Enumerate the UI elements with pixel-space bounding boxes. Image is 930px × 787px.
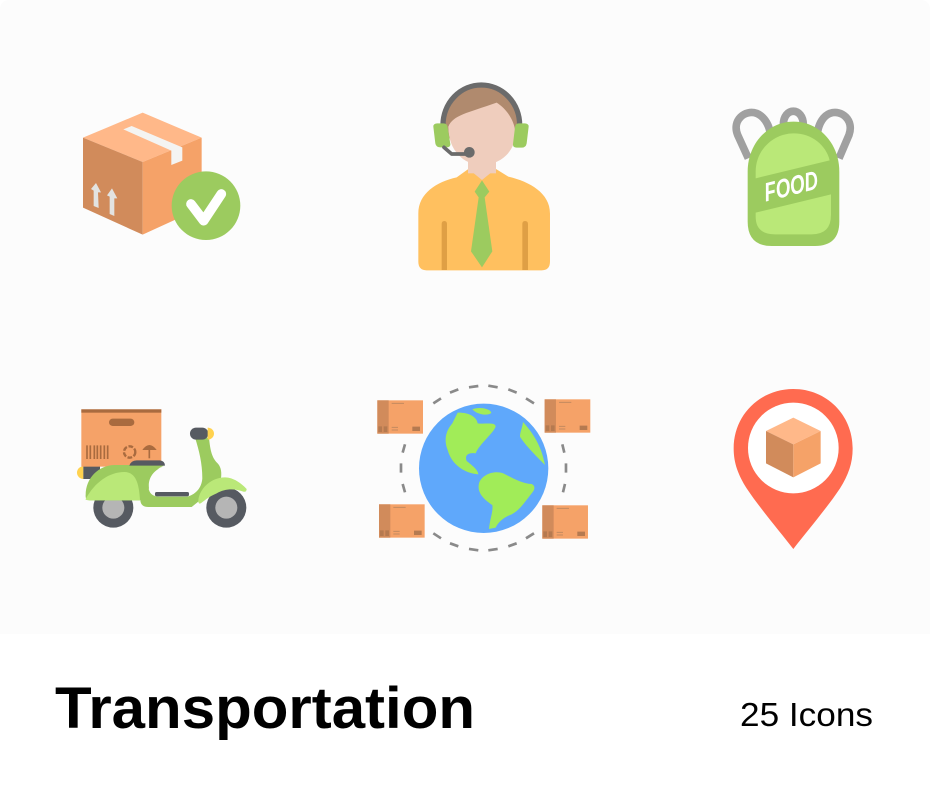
icon: global shipping globe	[377, 386, 590, 550]
icon: support agent with headset	[418, 85, 550, 270]
text: icon count: 25 Icons	[740, 696, 873, 733]
dashed orbit	[401, 386, 566, 550]
icon: parcel with check mark	[83, 113, 240, 240]
parcel: top right	[545, 399, 590, 433]
icon: delivery scooter	[77, 409, 247, 528]
text: FOOD label: FOOD	[762, 164, 820, 208]
icon: food backpack	[736, 111, 850, 246]
parcel: bottom right	[542, 505, 588, 539]
title: Transportation	[55, 676, 475, 741]
icon: location pin with parcel	[734, 389, 853, 549]
parcel: bottom left	[379, 504, 425, 538]
parcel: top left	[377, 400, 423, 434]
